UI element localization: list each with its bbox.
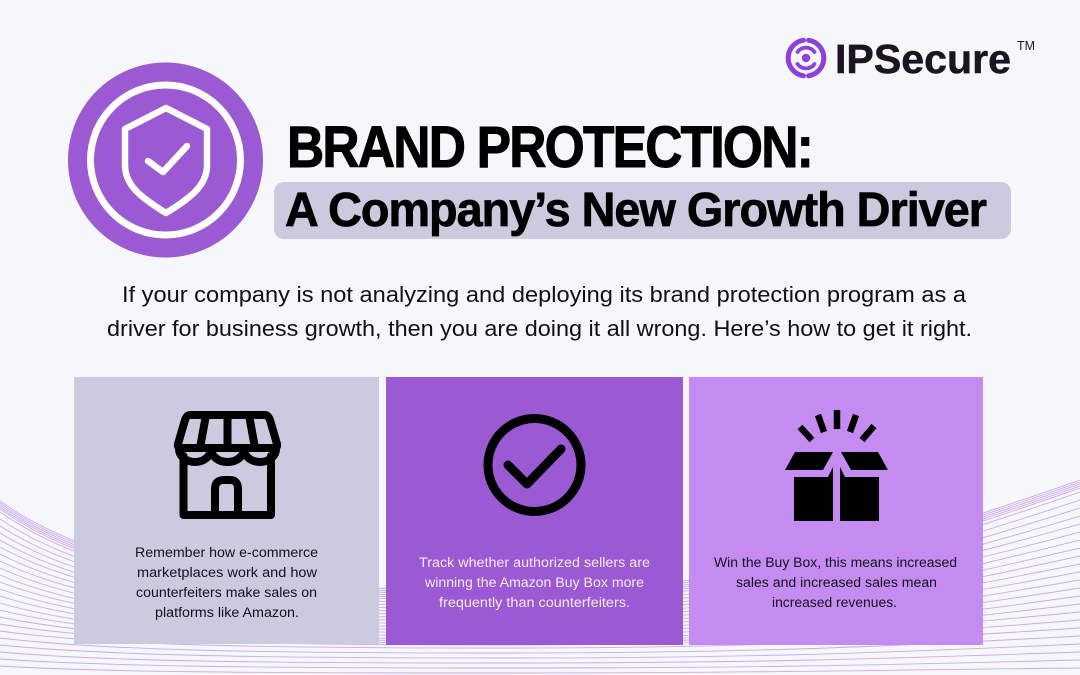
title [274, 115, 1011, 239]
panel text: frequently than counterfeiters. [439, 595, 630, 610]
panel text: sales and increased sales mean [736, 575, 937, 590]
panel: buy box [689, 377, 983, 645]
intro text [107, 282, 972, 341]
heading line two: A Company’s New Growth Driver [285, 184, 986, 237]
panel text: winning the Amazon Buy Box more [424, 575, 644, 590]
panel text [135, 545, 318, 620]
icon: shield badge [68, 62, 263, 258]
icon: check circle [488, 418, 581, 512]
intro text: driver for business growth, then you are doing it all wrong. Here’s how to get it right. [107, 316, 972, 341]
panel text: platforms like Amazon. [155, 605, 299, 620]
panel text: increased revenues. [772, 595, 897, 610]
panel text [714, 555, 957, 610]
background wave lines [0, 480, 1080, 673]
logo wordmark: IPSecure [835, 36, 1011, 82]
panel: track sellers [386, 377, 683, 645]
panel text: Track whether authorized sellers are [419, 555, 650, 570]
icon: open box [785, 410, 888, 521]
subtitle pill [274, 182, 1011, 239]
panel text: Remember how e-commerce [135, 545, 318, 560]
logo: IPSecure [788, 36, 1035, 82]
icon: logo target [788, 40, 824, 76]
panel text [419, 555, 650, 610]
icon: storefront [178, 415, 277, 515]
intro text: If your company is not analyzing and deploying its brand protection program as a [122, 282, 967, 307]
panel text: Win the Buy Box, this means increased [714, 555, 957, 570]
heading line one: BRAND PROTECTION: [287, 115, 812, 180]
panel text: counterfeiters make sales on [136, 585, 317, 600]
panel text: marketplaces work and how [137, 565, 317, 580]
trademark: TM [1017, 38, 1035, 53]
panel: marketplaces [74, 377, 379, 644]
